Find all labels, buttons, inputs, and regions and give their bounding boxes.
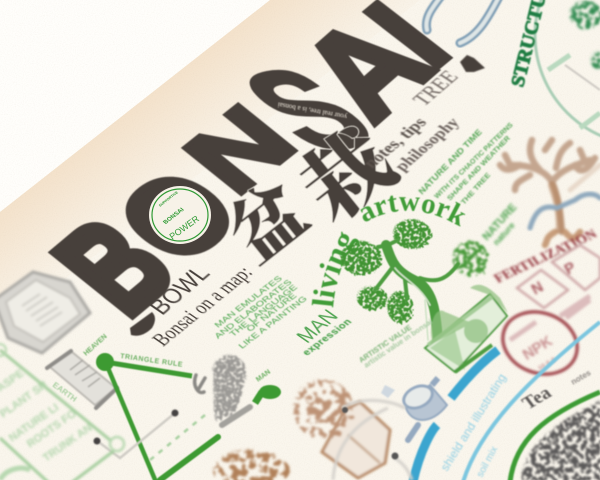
- label: nature: NATURE: [480, 202, 519, 243]
- fertilization diagram: [491, 227, 600, 384]
- brown tree: bottom centre: [292, 378, 352, 438]
- logo in O: [149, 186, 211, 244]
- letter S: S: [210, 45, 408, 175]
- heading: fertilization: FERTILIZATION: [491, 227, 600, 286]
- letter O: O: [88, 148, 266, 284]
- NPK bars: [510, 296, 590, 340]
- comma under B: [130, 312, 155, 336]
- quote: nature and time: WITH ITS CHAOTIC PATTERNS: [434, 122, 515, 200]
- quote: nature and time: THE TREE: [460, 172, 492, 206]
- grey plaque: [0, 272, 90, 353]
- foliage: [340, 219, 488, 323]
- label: nature: nature: [491, 220, 517, 247]
- heaven to earth line: [108, 368, 156, 480]
- large circle: structure diagram: [535, 0, 600, 145]
- heading: living: living: [310, 230, 360, 308]
- logo arc text: SUPPORTIVE: [158, 190, 179, 208]
- bonsai pot: [425, 285, 508, 372]
- quote: nature and time: SHAPE AND WEATHER: [446, 135, 512, 202]
- thin blue arc: [463, 322, 600, 480]
- construction dots: [342, 407, 398, 460]
- NPK stamp: [494, 302, 586, 384]
- NPK text: NPK: [520, 332, 556, 364]
- label: tree: TREE: [409, 67, 464, 110]
- quote: man emulates: MAN EMULATES: [213, 274, 284, 329]
- label: bowl: BOWL: [144, 261, 215, 319]
- heading: artwork: artwork: [360, 194, 466, 227]
- kanji: bonsai: [200, 95, 418, 285]
- N box: N: [528, 278, 546, 298]
- logo disc: [149, 186, 211, 244]
- tea stipple: [520, 400, 600, 480]
- green bonsai illustration: [340, 219, 508, 372]
- quote: man emulates: THE LANGUAGE: [228, 283, 299, 338]
- man dot head: [259, 385, 281, 399]
- blue label box: soil mix: [475, 445, 500, 479]
- triangle rule labels: MAN: [255, 369, 272, 384]
- figure body: [212, 355, 246, 420]
- earth line: [160, 437, 218, 480]
- text in S: your real tree, is a bonsai: [277, 100, 348, 121]
- logo power text: POWER: [168, 213, 201, 242]
- triangle rule labels: EARTH: [51, 380, 79, 404]
- title: BONSAI: [25, 0, 479, 339]
- panel text lines: ROOTS FO: [25, 407, 79, 450]
- trunk and branches: [375, 240, 458, 340]
- grey scroll: [47, 351, 117, 408]
- subtitle: philosophy: philosophy: [390, 114, 464, 174]
- tree icon: [460, 55, 485, 72]
- triangle rule labels: [51, 333, 272, 404]
- triangle rule labels: TRIANGLE RULE: [120, 353, 183, 369]
- man dot: [255, 392, 262, 403]
- label: expression: expression: [301, 317, 355, 358]
- label: man: MAN: [292, 306, 343, 347]
- triangle rule labels: HEAVEN: [83, 333, 109, 357]
- grey bonsai master figure: [195, 355, 250, 425]
- heaven dot: [96, 353, 114, 371]
- panel text lines: TRUNK AN: [41, 422, 94, 464]
- connector dots: [94, 410, 178, 444]
- green tea arc: [510, 392, 600, 480]
- subtitle: notes tips: notes, tips: [358, 113, 431, 171]
- brown hexagon: [322, 402, 390, 478]
- kanji sai: 栽: [272, 95, 418, 244]
- blue mortar icon: [381, 378, 447, 440]
- blue text along arc: shield and illustrating: [438, 371, 509, 474]
- quote: man emulates: OF NATURE: [245, 292, 298, 333]
- blue arcs: [413, 322, 600, 480]
- letter B: B: [25, 193, 204, 339]
- grey construction circle: [333, 400, 412, 480]
- figure lines: [195, 375, 250, 425]
- triangle rule diagram: [96, 353, 281, 480]
- paper edge tint: [0, 0, 420, 330]
- quote: man emulates: LIKE A PAINTING: [237, 295, 309, 350]
- P box: [552, 245, 600, 290]
- note: artistic value: artistic value in bonsai: [362, 317, 434, 370]
- blue ribbon: [530, 194, 600, 228]
- label: tea: Tea: [518, 382, 556, 414]
- green text panel: [0, 344, 124, 480]
- subtitle: bonsai on a map: Bonsai on a map:: [148, 263, 258, 350]
- brown tree: bottom: [212, 448, 288, 480]
- quote: nature and time: NATURE AND TIME: [416, 127, 484, 196]
- panel text lines: [0, 367, 94, 464]
- quote: man emulates: [213, 274, 309, 350]
- structure branch lines: [565, 65, 600, 90]
- panel text lines: NATURE LI: [7, 401, 61, 444]
- grey connector lines: [100, 413, 175, 458]
- letter N: N: [162, 87, 318, 212]
- heaven to man line: [105, 362, 192, 376]
- treetop foliage: [569, 0, 600, 28]
- label: small tea note: notes: [570, 368, 593, 387]
- logo centre text: BONSAI: [163, 207, 186, 225]
- note: artistic value: ARTISTIC VALUE: [357, 323, 413, 365]
- quote: man emulates: AND ELABORATES: [213, 278, 294, 340]
- green dashes: [150, 415, 205, 460]
- thick blue arc: [413, 425, 437, 480]
- blue tubes at top: [426, 0, 500, 43]
- kanji bon: 盆: [200, 153, 328, 285]
- logo ring: [152, 189, 208, 241]
- brown tree: top right: [500, 140, 600, 245]
- N box: [517, 245, 600, 308]
- panel borders: [0, 350, 115, 480]
- N box: P: [562, 259, 579, 278]
- NPK sub text: 10 6 6: [537, 357, 557, 373]
